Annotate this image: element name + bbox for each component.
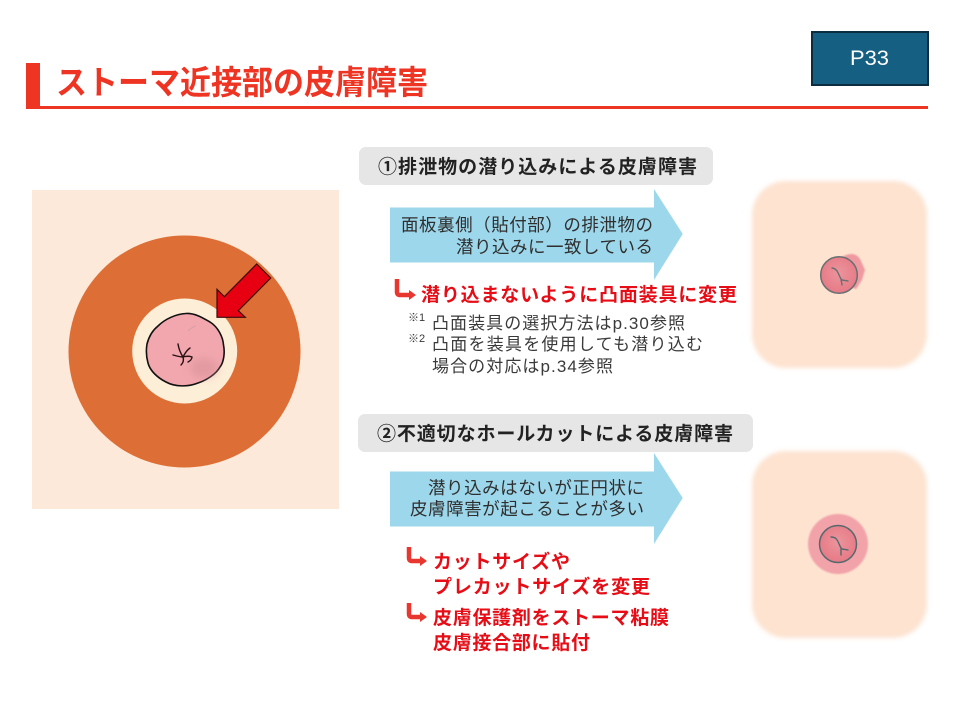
- heading 2: [358, 414, 753, 452]
- arrow callout 2: 皮膚障害が起こることが多い: [410, 499, 644, 519]
- action 2a: プレカットサイズを変更: [433, 575, 650, 598]
- action 2b: 皮膚保護剤をストーマ粘膜: [433, 607, 669, 629]
- arrow callout 1: [390, 189, 683, 280]
- action 2a: [409, 547, 650, 598]
- footnotes: ※1: [408, 312, 425, 324]
- panel: stoma diagram: [32, 190, 339, 509]
- skin damage ring: [68, 236, 300, 468]
- footnotes: 凸面を装具を使用しても潜り込む: [432, 334, 703, 354]
- bent arrow 1: [397, 279, 416, 300]
- action text 1: 潜り込まないように凸面装具に変更: [421, 284, 737, 306]
- heading 1: ①排泄物の潜り込みによる皮膚障害: [378, 156, 697, 178]
- page reference badge: [812, 32, 928, 85]
- footnotes: 場合の対応はp.34参照: [432, 357, 613, 376]
- photo 2: peristomal ring damage: [752, 451, 927, 638]
- footnotes: [408, 312, 703, 376]
- footnotes: 凸面装具の選択方法はp.30参照: [432, 314, 685, 333]
- heading 2: ②不適切なホールカットによる皮膚障害: [377, 423, 733, 445]
- arrow callout 1: 面板裏側（貼付部）の排泄物の: [401, 215, 653, 235]
- action 2b: 皮膚接合部に貼付: [433, 632, 590, 654]
- action 2a: カットサイズや: [433, 550, 570, 573]
- photo 1: leakage skin damage: [752, 181, 927, 368]
- page title: ストーマ近接部の皮膚障害: [56, 64, 428, 101]
- stoma opening: [173, 344, 192, 365]
- stoma: [146, 313, 224, 386]
- inner skin circle: [132, 298, 237, 404]
- arrow callout 2: [390, 453, 683, 544]
- footnotes: ※2: [408, 333, 425, 345]
- action 2b: [409, 603, 669, 654]
- arrow callout 2: 潜り込みはないが正円状に: [428, 478, 644, 498]
- page title: [26, 63, 928, 109]
- heading 1: [359, 147, 713, 185]
- page reference badge: P33: [850, 47, 889, 70]
- arrow callout 1: 潜り込みに一致している: [456, 237, 653, 257]
- red arrow: [217, 264, 271, 317]
